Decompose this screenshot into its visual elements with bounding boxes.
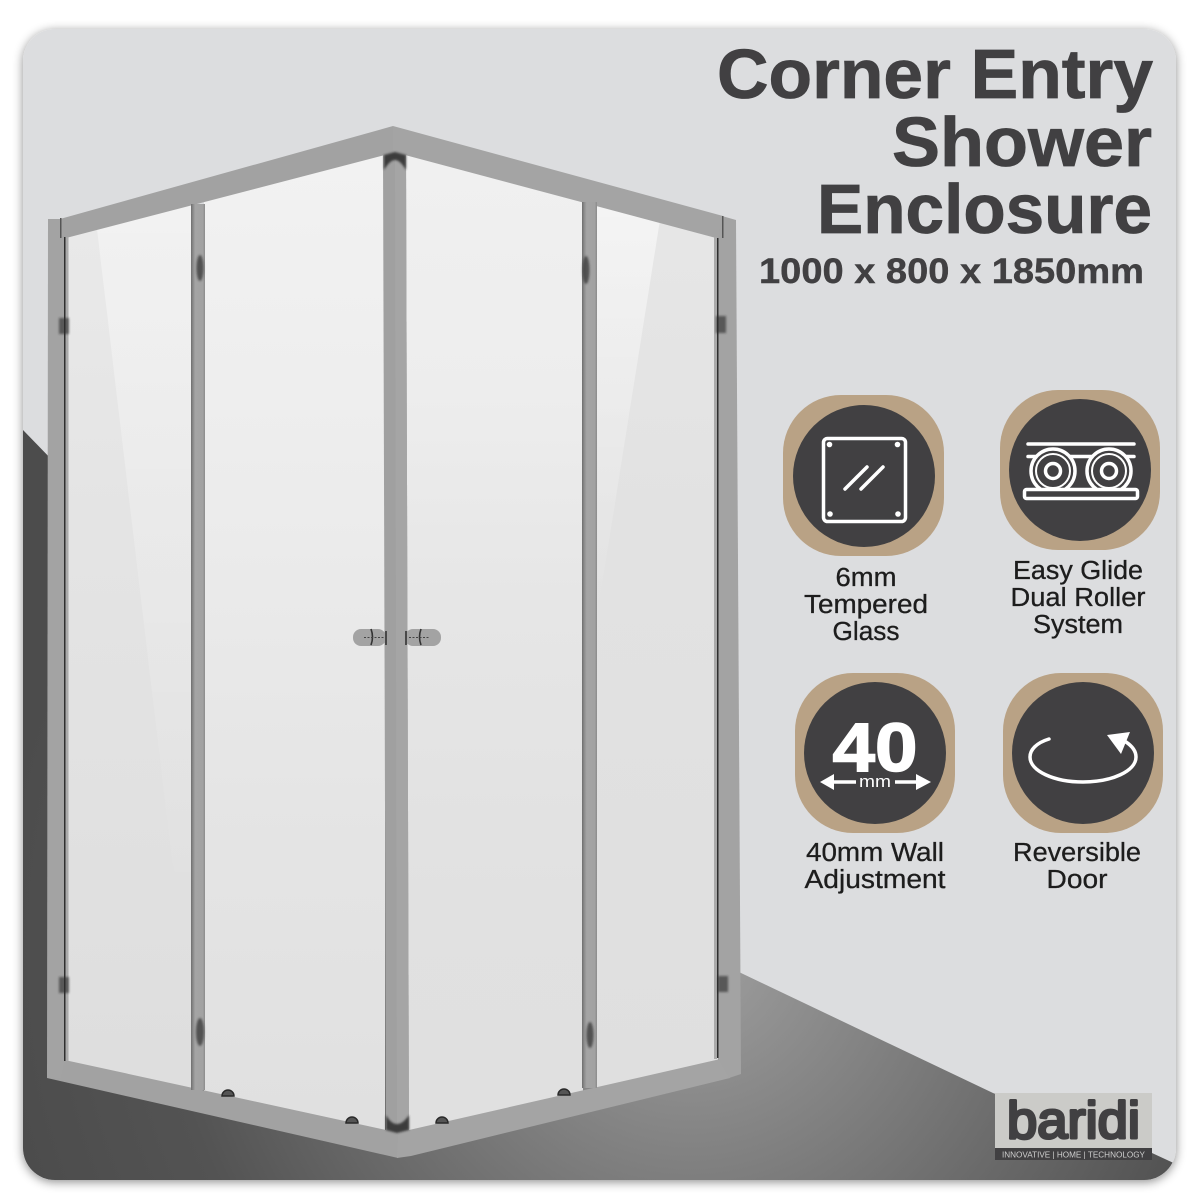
tagline: INNOVATIVE | HOME | TECHNOLOGY — [1002, 1150, 1145, 1160]
title: Enclosure — [817, 170, 1152, 248]
label: 6mm — [836, 564, 896, 592]
glass panel: left door — [204, 153, 385, 1136]
handle: right door — [405, 629, 441, 646]
post: far right — [718, 216, 741, 1078]
floor gradient shape — [0, 407, 1180, 1185]
shower enclosure — [47, 126, 741, 1158]
bottom rail: left — [47, 1059, 398, 1158]
glass panel: far left fixed — [66, 204, 192, 1096]
post edge: far right — [717, 238, 718, 1058]
icon: rotation arrow — [1003, 673, 1163, 833]
post: centre corner — [383, 153, 409, 1132]
feature: reversible door — [1003, 673, 1163, 894]
dimensions: 1000 x 800 x 1850mm — [759, 252, 1144, 291]
feature: 6mm tempered glass — [783, 395, 944, 646]
door rollers — [222, 1089, 570, 1123]
post: far left — [47, 219, 65, 1078]
logo — [995, 1092, 1152, 1160]
handle: left door — [353, 629, 386, 646]
icon: 40mm: 40 — [832, 709, 918, 786]
top rail: right — [393, 126, 723, 238]
wordmark: baridi — [1007, 1092, 1140, 1150]
feature: 40mm wall adjustment — [795, 673, 955, 894]
label — [1010, 557, 1146, 639]
door handles — [353, 629, 441, 646]
post: right intermediate — [582, 202, 597, 1088]
feature: dual roller system — [1000, 390, 1160, 639]
dark corner hardware — [59, 152, 728, 1133]
label: Tempered — [804, 591, 928, 619]
label — [804, 564, 928, 646]
label: Door — [1046, 866, 1108, 894]
glass panel: right door — [406, 153, 583, 1136]
post reflections — [196, 255, 204, 281]
label — [1013, 839, 1141, 894]
post edge: far left — [64, 237, 66, 1061]
title — [717, 35, 1153, 248]
label: System — [1033, 611, 1123, 639]
label — [804, 839, 946, 894]
title: Shower — [892, 103, 1152, 181]
glass highlight: far right — [596, 204, 660, 610]
label: Glass — [832, 618, 900, 646]
wall brackets — [59, 318, 69, 334]
icon: glass pane — [783, 395, 944, 556]
post: left intermediate — [191, 204, 205, 1090]
title: Corner Entry — [717, 35, 1153, 113]
label: 40mm Wall — [806, 839, 944, 867]
label: Easy Glide — [1013, 557, 1143, 585]
top rail: left — [60, 126, 395, 238]
glass panel: far right fixed — [596, 204, 718, 1096]
label: Adjustment — [804, 866, 946, 894]
bottom rail: right — [397, 1057, 730, 1158]
label: Dual Roller — [1010, 584, 1146, 612]
icon: 40mm — [795, 673, 955, 833]
glass highlight: far left — [97, 204, 192, 960]
icon: rollers — [1000, 390, 1160, 550]
label: Reversible — [1013, 839, 1141, 867]
icon: 40mm: mm — [859, 772, 891, 791]
